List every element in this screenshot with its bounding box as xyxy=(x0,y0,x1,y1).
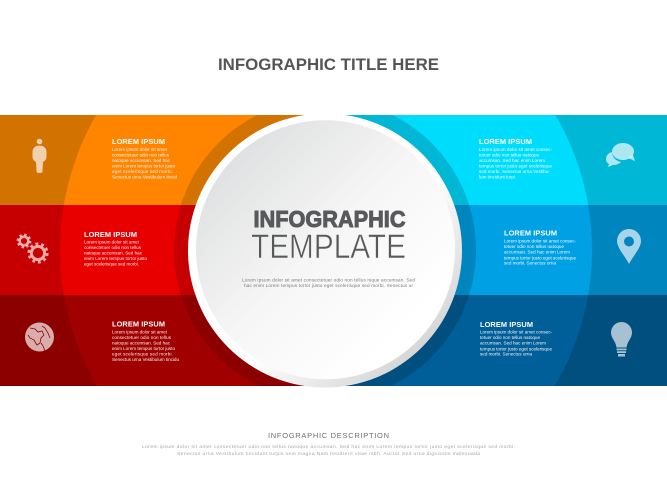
panel: center circle xyxy=(188,114,462,388)
icon: gears xyxy=(18,235,47,262)
panel: red text: Lorem ipsum dolor sit amet xyxy=(84,240,140,244)
panel: orange text: Senectus urna Vestibulum tincid xyxy=(112,174,177,180)
center heading: INFOGRAPHIC xyxy=(254,206,406,232)
panel: maroon text: consectetuer odio non tellus xyxy=(112,335,172,340)
panel: cyan text: accumsan. Sed hac enim Lorem xyxy=(479,158,545,163)
panel: red text: LOREM IPSUM xyxy=(84,230,137,239)
panel: maroon text xyxy=(112,320,179,362)
panel: red text: eget scelerisque sed morbi. xyxy=(84,262,139,266)
center subheading: TEMPLATE xyxy=(251,228,406,266)
icon: map pin xyxy=(617,229,641,264)
description text: Lorem ipsum dolor sit amet consectetuer odio non tellus natoque accumsan. Sed hac enim Lorem tempus tortor justo eget scelerisque sed morbi. xyxy=(142,444,515,450)
panel: navy text: tempus tortor justo eget scelerisque xyxy=(480,346,552,351)
panel: maroon text: eget scelerisque sed morbi. xyxy=(112,352,173,357)
panel: cyan text: tempus tortor justo eget scelerisque xyxy=(479,164,552,168)
panel: orange text: natoque accumsan. Sed hac xyxy=(112,158,171,163)
icon: globe xyxy=(25,322,54,352)
description text: Senectus urna Vestibulum tincidunt turpis sem magna Nam hendrerit vitae nibh. Auctor Sed urna dignissim malesuada xyxy=(177,451,480,457)
description text xyxy=(142,444,515,457)
panel: navy text: sed morbi. Senectus urna xyxy=(480,352,532,357)
panel: navy text: accumsan. Sed hac enim Lorem xyxy=(480,341,546,346)
panel: navy text: LOREM IPSUM xyxy=(480,320,533,329)
panel: blue text xyxy=(504,228,576,266)
panel: blue text: sed morbi. Senectus urna xyxy=(504,261,556,266)
panel: maroon text: natoque accumsan. Sed hac xyxy=(112,340,171,345)
panel: blue text: accumsan. Sed hac enim Lorem xyxy=(504,250,570,255)
icon: person xyxy=(32,139,46,173)
panel: maroon text: Lorem ipsum dolor sit amet xyxy=(112,329,168,334)
panel: cyan text: LOREM IPSUM xyxy=(479,137,532,146)
panel: blue text: Lorem ipsum dolor sit amet consec- xyxy=(504,239,576,244)
panel: maroon text: enim Lorem tempus tortor justo xyxy=(112,346,175,351)
panel: colored bands xyxy=(0,115,667,386)
panel: cyan text xyxy=(479,137,552,180)
panel: orange text: consectetuer odio non tellus xyxy=(112,152,170,158)
icon: speech bubbles xyxy=(606,143,635,167)
panel: orange text: eget scelerisque sed morbi. xyxy=(112,169,173,174)
panel: red text xyxy=(84,230,147,266)
panel: blue text: tetuer odio non tellus natoque xyxy=(504,244,564,249)
center text: hac enim Lorem tempus tortor justo eget scelerisque sed morbi. Senectus ur xyxy=(244,283,413,288)
center text: Lorem ipsum dolor sit amet consectetuer odio non tellus nique accumsan. Sed xyxy=(242,278,415,282)
panel: cyan text: tetuer odio non tellus natoque xyxy=(479,152,539,158)
description heading: INFOGRAPHIC DESCRIPTION xyxy=(268,431,389,440)
panel: red text: natoque accumsan. Sed hac xyxy=(84,250,143,256)
panel: orange text: Lorem ipsum dolor sit amet xyxy=(112,147,168,152)
title: INFOGRAPHIC TITLE HERE xyxy=(218,55,439,74)
icon: light bulb xyxy=(611,322,632,356)
center text xyxy=(242,278,415,288)
panel: navy text: Lorem ipsum dolor sit amet consec- xyxy=(480,330,552,335)
panel: orange text: LOREM IPSUM xyxy=(112,137,165,146)
panel: orange text xyxy=(112,137,177,180)
panel: red text: consectetuer odio non tellus xyxy=(84,245,142,250)
panel: blue text: tempus tortor justo eget scelerisque xyxy=(504,255,576,260)
panel: navy text: tetuer odio non tellus natoque xyxy=(480,335,540,340)
panel: blue text: LOREM IPSUM xyxy=(504,228,557,238)
panel: cyan text: lum tincidunt turpi xyxy=(479,174,515,180)
panel: red text: enim Lorem tempus tortor justo xyxy=(84,256,147,261)
panel: cyan text: Lorem ipsum dolor sit amet consec- xyxy=(479,147,552,152)
panel: orange text: enim Lorem tempus tortor justo xyxy=(112,164,175,168)
panel: cyan text: sed morbi. Senectus urna Vestibu- xyxy=(479,169,550,174)
panel: maroon text: LOREM IPSUM xyxy=(112,320,165,328)
panel: maroon text: Senectus urna Vestibulum tincidu xyxy=(112,357,179,362)
panel: navy text xyxy=(480,320,552,357)
